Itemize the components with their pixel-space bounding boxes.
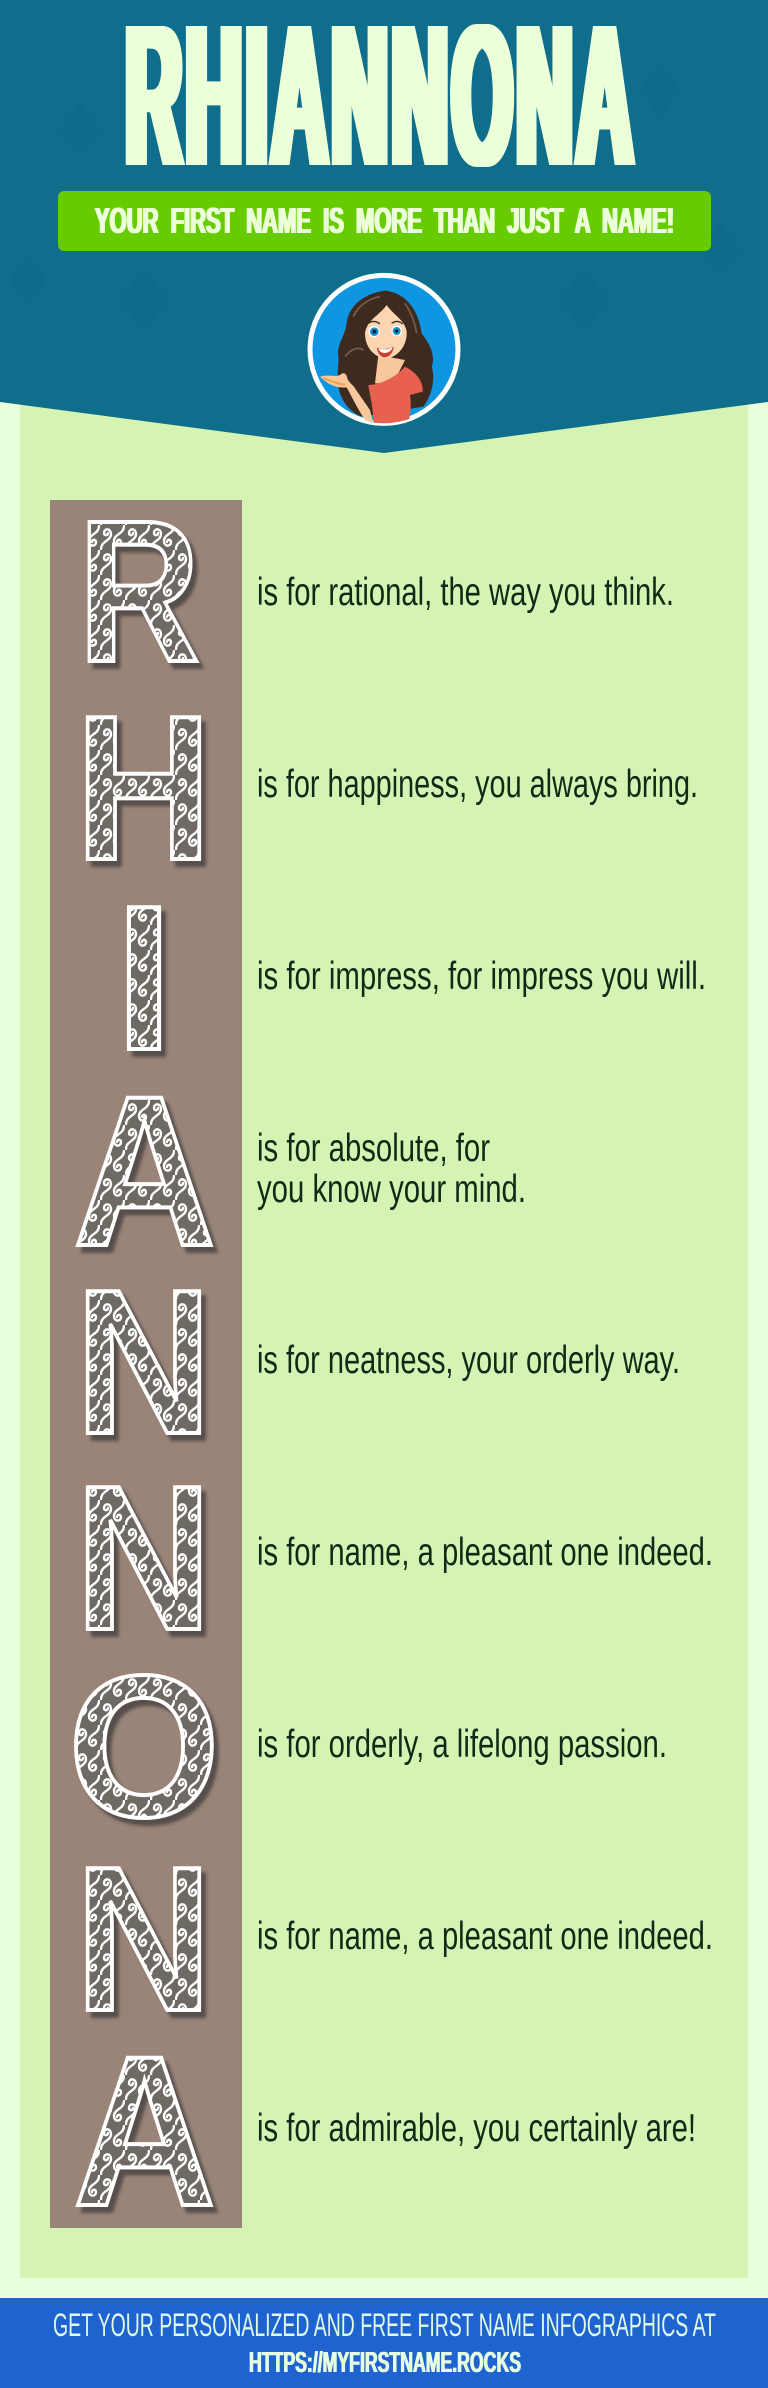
letter O: O: [68, 1633, 220, 1859]
letter N: N: [75, 1247, 212, 1477]
letter H: H: [75, 673, 212, 903]
letter N: N: [75, 1443, 212, 1673]
letter R: R: [78, 478, 200, 704]
text blocks: acrostic lines: [257, 571, 713, 2150]
line A: is for absolute, for: [257, 1127, 490, 1170]
panel: content background: [20, 380, 748, 2278]
panel: letter column: [50, 478, 242, 2251]
letter I: I: [115, 863, 173, 1093]
icon: avatar woman portrait: [310, 275, 458, 423]
subtitle banner: [58, 191, 711, 251]
footer: [0, 2298, 768, 2388]
line A: you know your mind.: [257, 1168, 526, 1211]
letter N: N: [75, 1824, 212, 2054]
letter A: A: [73, 2012, 216, 2251]
footer: HTTPS://MYFIRSTNAME.ROCKS: [249, 2347, 521, 2379]
header banner: [0, 0, 768, 453]
letter A: A: [73, 1052, 216, 1291]
line A: [257, 1127, 526, 1211]
